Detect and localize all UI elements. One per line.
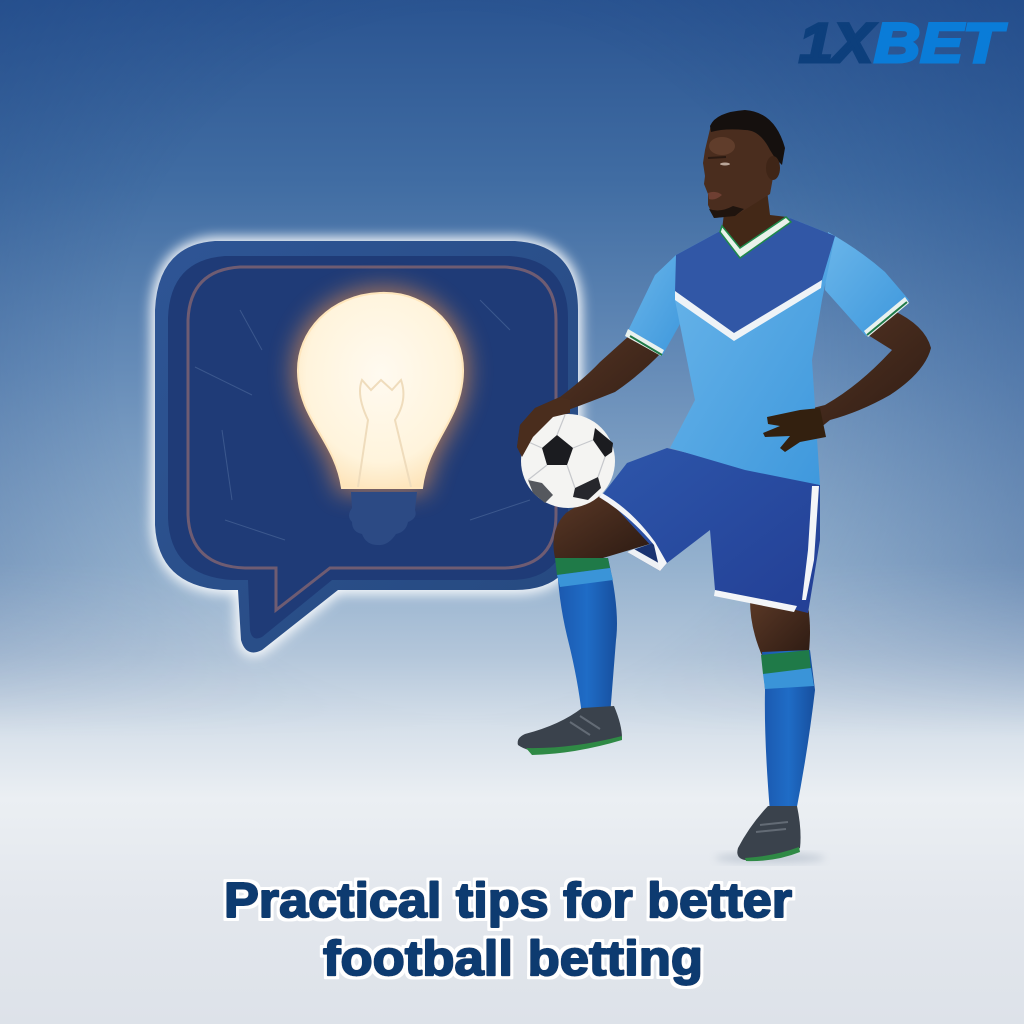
- head: [703, 110, 785, 218]
- forehead highlight: [709, 137, 735, 155]
- chevron: [675, 280, 822, 341]
- bubble glow: [155, 241, 578, 652]
- torso: [670, 218, 835, 485]
- bulb base: [349, 492, 417, 545]
- standing leg: [750, 600, 810, 660]
- bubble inner outline: [188, 267, 556, 610]
- shorts leg opening: [627, 543, 667, 571]
- hand on hip: [763, 408, 826, 452]
- right sleeve: [825, 232, 909, 336]
- bulb glass: [298, 293, 463, 488]
- bubble face: [168, 256, 568, 638]
- raised boot: [518, 706, 622, 755]
- football player: [517, 110, 931, 863]
- ear: [766, 156, 780, 180]
- title: Practical tips for better: [224, 874, 792, 928]
- chest yoke: [675, 218, 835, 337]
- football: [521, 414, 615, 508]
- left arm: [517, 335, 662, 457]
- neck: [722, 190, 787, 252]
- lower hem: [714, 590, 797, 612]
- side stripe: [802, 486, 819, 600]
- collar: [720, 217, 791, 258]
- title: [224, 874, 792, 986]
- face: [703, 115, 778, 218]
- jersey: [625, 217, 909, 485]
- lips: [708, 192, 722, 200]
- bulb filament: [358, 380, 411, 487]
- title: football betting: [323, 932, 703, 986]
- eye: [720, 162, 730, 166]
- scratches: [195, 300, 530, 540]
- logo: 1XBET: BET: [874, 11, 1007, 74]
- raised leg sock: [555, 558, 617, 716]
- standing boot: [737, 806, 801, 861]
- bubble body: [155, 241, 578, 652]
- ground shadow: [715, 853, 825, 863]
- beard: [709, 206, 744, 218]
- shorts: [599, 448, 820, 613]
- bulb halo: [298, 293, 463, 488]
- logo: 1XBET: [799, 11, 1007, 74]
- right arm: [765, 310, 931, 452]
- left sleeve: [626, 255, 685, 356]
- logo: 1XBET: 1X: [799, 11, 877, 74]
- raised leg hem: [599, 493, 667, 571]
- hair: [710, 110, 785, 165]
- raised knee and thigh: [553, 495, 653, 558]
- standing leg sock: [761, 650, 815, 812]
- speech bubble with light bulb: [155, 241, 578, 652]
- brow: [708, 157, 726, 158]
- hand on ball: [517, 397, 570, 457]
